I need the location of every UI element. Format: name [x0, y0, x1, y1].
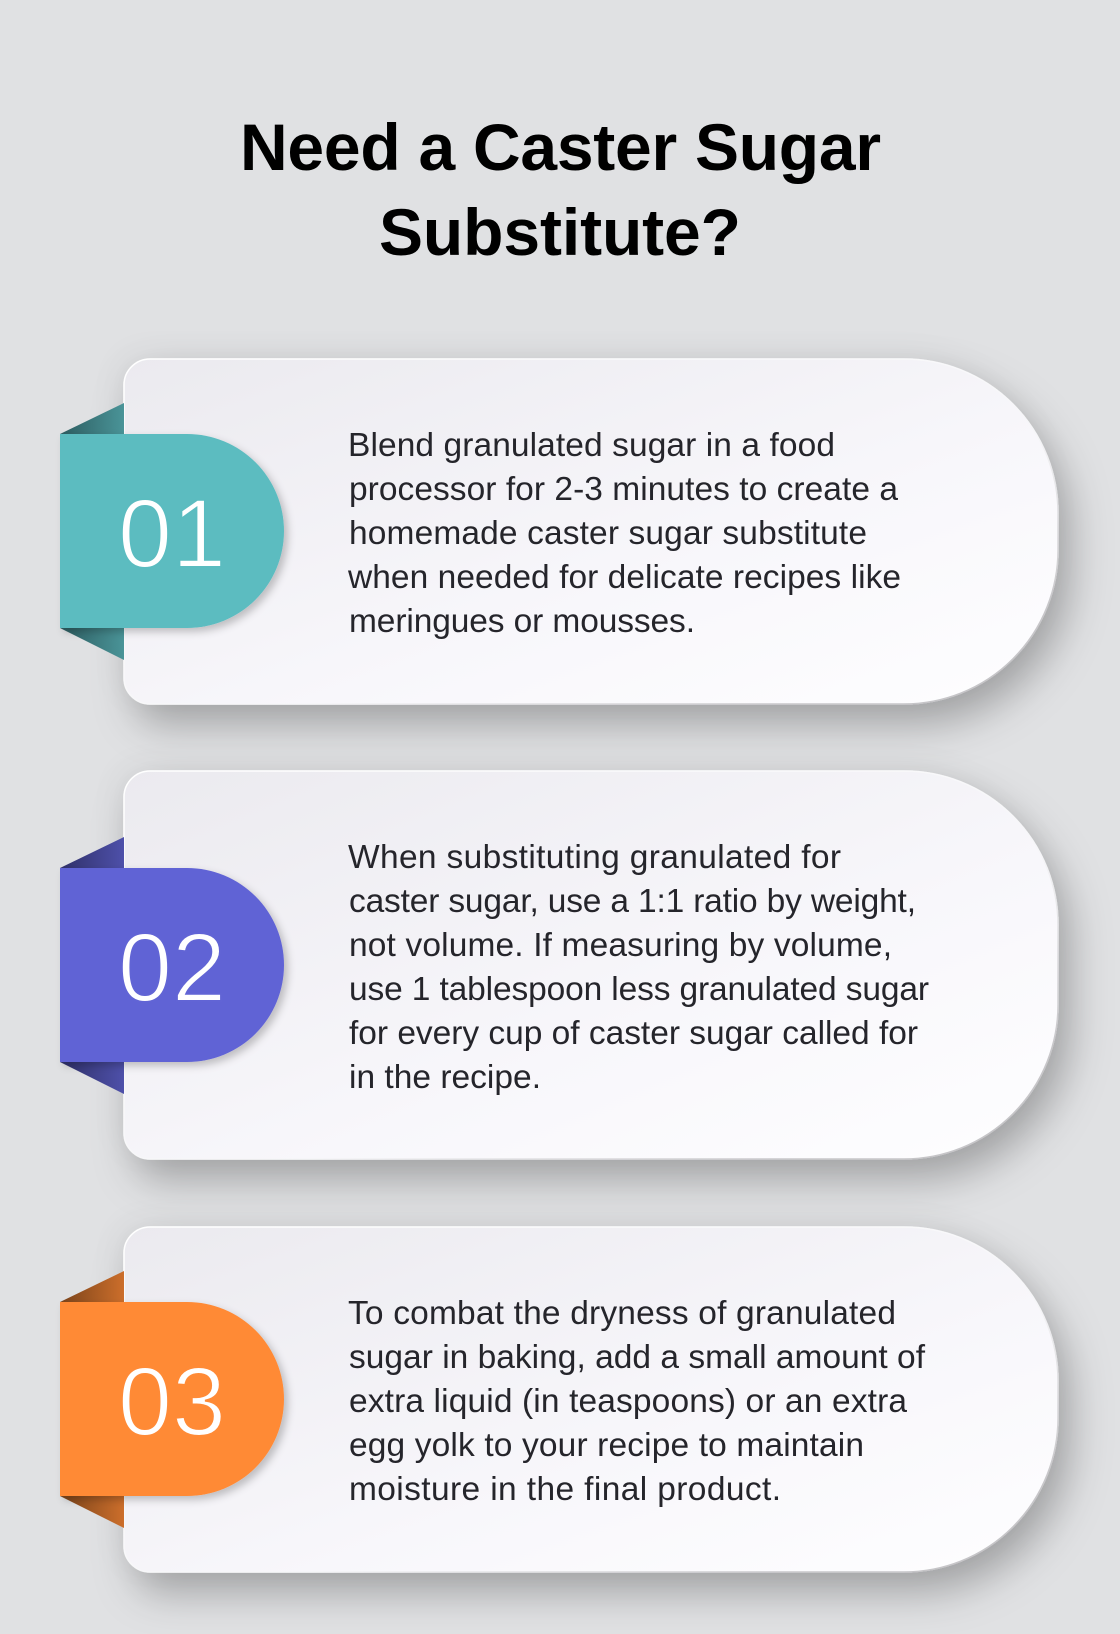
text: step 3: moisture in the final product.	[349, 1471, 781, 1508]
text: step 1: Blend granulated sugar in a food	[348, 427, 835, 464]
text: step 1	[347, 427, 901, 640]
text: step 3: extra liquid (in teaspoons) or an extra	[349, 1383, 907, 1420]
panel: step 2	[60, 771, 1058, 1159]
number badge 1: 01	[118, 479, 226, 588]
number badge 1	[60, 434, 284, 628]
title	[240, 110, 881, 269]
ribbon fold 2	[60, 837, 124, 1094]
text: step 3: egg yolk to your recipe to maintain	[349, 1427, 864, 1464]
text: step 2: use 1 tablespoon less granulated sugar	[349, 971, 929, 1008]
text: step 3: To combat the dryness of granulated	[348, 1295, 896, 1332]
title: Substitute?	[379, 195, 741, 269]
panel: step 3	[60, 1227, 1058, 1572]
panel: step 1	[60, 359, 1058, 704]
text: step 1: homemade caster sugar substitute	[349, 515, 867, 552]
number badge 3	[60, 1302, 284, 1496]
text: step 2: not volume. If measuring by volume,	[349, 927, 892, 964]
text: step 3: sugar in baking, add a small amount of	[349, 1339, 926, 1376]
ribbon fold 1	[60, 403, 124, 660]
number badge 2	[60, 868, 284, 1062]
card 2 shape	[124, 771, 1058, 1159]
text: step 2	[348, 839, 929, 1096]
card 1 shape	[124, 359, 1058, 704]
text: step 2: for every cup of caster sugar called for	[349, 1015, 918, 1052]
text: step 1: processor for 2-3 minutes to create a	[349, 471, 898, 508]
card 3 shape	[124, 1227, 1058, 1572]
text: step 1: when needed for delicate recipes like	[347, 559, 901, 596]
ribbon fold 3	[60, 1271, 124, 1528]
text: step 2: caster sugar, use a 1:1 ratio by weight,	[349, 883, 916, 920]
title: Need a Caster Sugar	[240, 110, 881, 184]
text: step 1: meringues or mousses.	[349, 603, 695, 640]
text: step 3	[348, 1295, 926, 1508]
text: step 2: in the recipe.	[349, 1059, 541, 1096]
text: step 2: When substituting granulated for	[348, 839, 841, 876]
number badge 2: 02	[118, 913, 226, 1022]
number badge 3: 03	[118, 1347, 226, 1456]
